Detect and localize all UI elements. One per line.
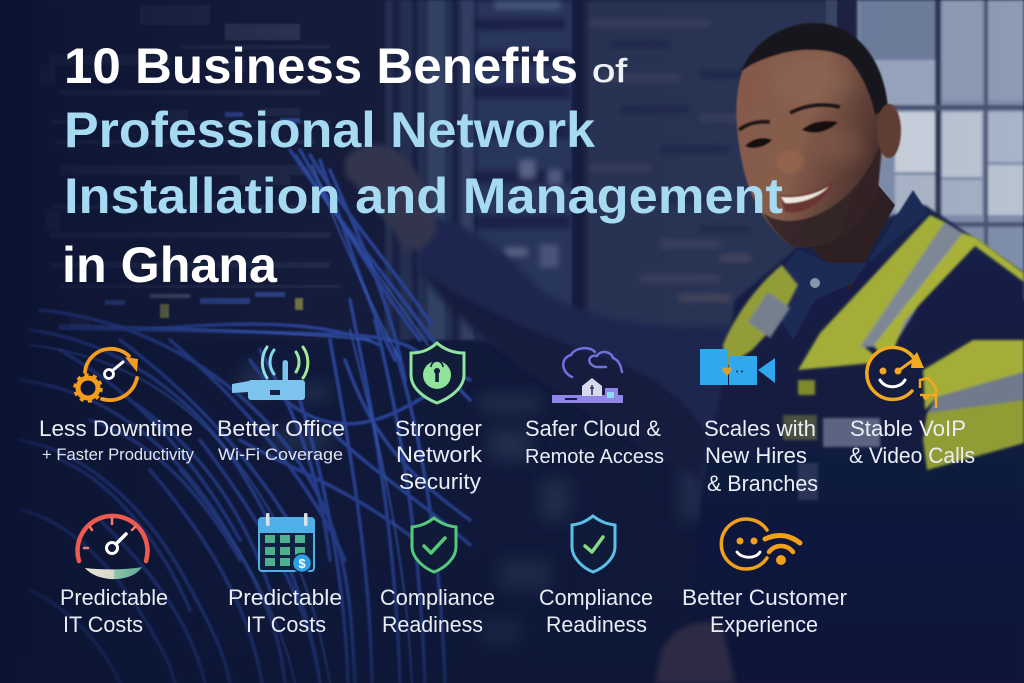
benefit: scales with new hires: Scales with <box>704 416 816 441</box>
title: Professional Network <box>64 102 595 158</box>
benefit: compliance readiness (green shield): Compliance <box>380 585 495 610</box>
collar <box>775 190 928 340</box>
window <box>857 0 1024 300</box>
photo: technician <box>345 23 1024 683</box>
ear <box>877 104 901 158</box>
sleeve reflective stripes <box>923 340 1024 410</box>
benefit: predictable it costs (gauge) <box>60 516 168 637</box>
benefit: compliance readiness (blue shield): Compliance <box>539 585 653 610</box>
right strap <box>798 215 945 370</box>
server rack <box>40 0 385 340</box>
benefit: scales with new hires: New Hires <box>705 443 807 468</box>
title <box>62 38 783 293</box>
eyebrows <box>739 122 770 130</box>
benefit: less downtime: Less Downtime <box>39 416 193 441</box>
lower hand <box>655 622 735 683</box>
benefit: better office wi-fi: Wi-Fi Coverage <box>218 445 343 464</box>
forehead highlight <box>770 58 854 106</box>
benefit: better customer experience: Experience <box>710 612 818 637</box>
benefit: stronger network security: Security <box>399 469 482 494</box>
dark divider <box>572 0 586 340</box>
hi-vis vest <box>723 215 1024 500</box>
benefit: safer cloud and remote access: Safer Cloud & <box>525 416 661 441</box>
benefit: predictable it costs (calendar): IT Costs <box>246 612 326 637</box>
benefit: stronger network security: Network <box>396 442 483 467</box>
benefit: predictable it costs (gauge): Predictable <box>60 585 168 610</box>
title: in Ghana <box>62 237 278 293</box>
benefit: better customer experience: Better Customer <box>682 585 848 610</box>
benefit: compliance readiness (blue shield): Readiness <box>546 612 647 637</box>
benefit: scales with new hires: & Branches <box>707 471 818 496</box>
smile <box>780 180 834 213</box>
benefit: safer cloud and remote access: Remote Access <box>525 445 664 468</box>
benefit: less downtime: + Faster Productivity <box>42 445 194 464</box>
neck <box>800 185 895 290</box>
benefit: stable voip and video calls: Stable VoIP <box>850 416 966 441</box>
nose <box>776 150 804 174</box>
torso <box>697 205 1024 683</box>
title: of <box>592 52 628 89</box>
second server cabinet <box>475 0 575 340</box>
network cables <box>20 150 470 683</box>
icon: speedometer gauge <box>78 516 148 579</box>
eyes <box>745 138 772 148</box>
benefit: better office wi-fi <box>217 347 345 464</box>
title: 10 Business Benefits <box>64 38 578 94</box>
icon: gear and refresh dial <box>75 349 138 401</box>
benefit: stable voip and video calls <box>849 347 975 468</box>
beard <box>763 140 881 247</box>
icon: video camera <box>700 349 775 385</box>
arm reaching to rack <box>345 144 750 480</box>
benefit: less downtime <box>39 349 194 464</box>
icon: smiling call dial <box>867 347 936 408</box>
rack connectors <box>105 112 303 318</box>
button <box>810 278 820 288</box>
icon: shield with lock <box>411 343 464 403</box>
title: Installation and Management <box>64 168 783 224</box>
benefit: stable voip and video calls: & Video Calls <box>849 443 975 468</box>
metal rack rails <box>385 0 475 340</box>
benefit: compliance readiness (blue shield) <box>539 516 653 637</box>
dark pillar <box>826 0 857 320</box>
icon: clouds over house <box>552 348 623 403</box>
icon: green shield check <box>412 518 456 572</box>
benefit: stronger network security: Stronger <box>395 416 482 441</box>
benefit: compliance readiness (green shield) <box>380 518 495 637</box>
icon: smiley with wi-fi <box>721 519 800 569</box>
benefit: better office wi-fi: Better Office <box>217 416 345 441</box>
icon: calendar with dollar coin: $ <box>298 556 306 571</box>
benefit: compliance readiness (green shield): Readiness <box>382 612 483 637</box>
hair <box>741 23 888 115</box>
blurred server lights <box>240 365 702 645</box>
benefit: predictable it costs (calendar): Predictable <box>228 585 342 610</box>
cheek highlight <box>820 128 864 164</box>
brighter cable highlights <box>30 155 428 683</box>
benefit: predictable it costs (calendar) <box>228 513 342 637</box>
benefit: scales with new hires <box>700 349 818 496</box>
left strap <box>723 265 798 368</box>
icon: blue shield check <box>572 516 615 572</box>
benefit: stronger network security <box>395 343 483 494</box>
pocket details <box>798 380 815 395</box>
benefit: predictable it costs (gauge): IT Costs <box>63 612 143 637</box>
benefit: better customer experience <box>682 519 848 637</box>
face <box>736 23 901 247</box>
brick wall <box>586 0 832 340</box>
benefit: safer cloud and remote access <box>525 348 664 468</box>
icon: wi-fi router <box>232 347 308 400</box>
